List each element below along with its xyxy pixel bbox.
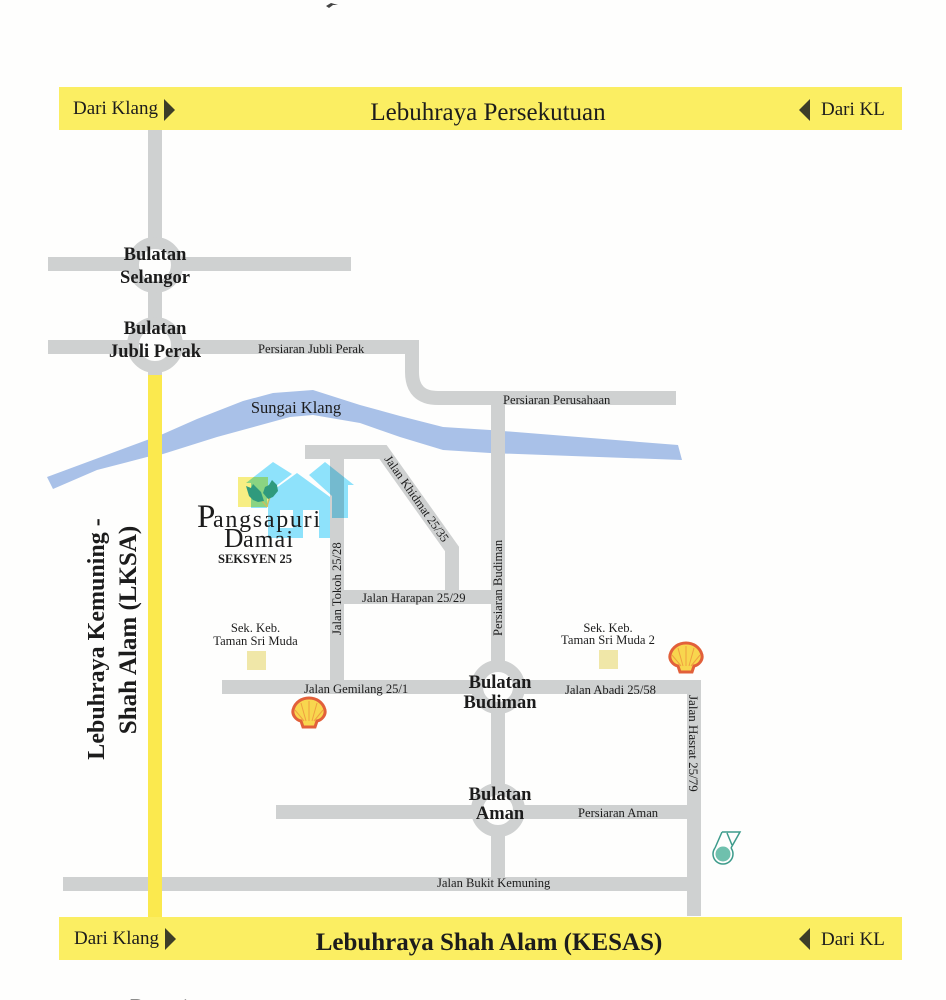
road name labels: Persiaran Budiman	[491, 539, 505, 636]
river: Sungai Klang	[47, 390, 682, 489]
school: Sek. Keb. Taman Sri Muda: Taman Sri Muda	[213, 634, 298, 648]
text: Dari Klang bottom: Dari Klang	[74, 928, 159, 949]
text: Dari KL top: Dari KL	[821, 99, 885, 120]
roundabout labels: Jubli Perak	[109, 342, 202, 362]
road: Persiaran Jubli Perak and Persiaran Perusahaan	[48, 347, 676, 398]
roundabout: Bulatan Aman	[477, 789, 519, 831]
road name labels: Jalan Hasrat 25/79	[686, 695, 701, 792]
top banner: Lebuhraya Persekutuan	[59, 87, 902, 130]
arrow: right top	[164, 99, 175, 121]
road: Lebuhraya Kemuning yellow	[148, 375, 162, 920]
roundabout labels: Bulatan	[124, 245, 187, 265]
road name labels: Jalan Khidmat 25/35	[382, 453, 452, 545]
heading: Lebuhraya Persekutuan: Lebuhraya Persekutuan	[370, 99, 606, 126]
road: north-south trunk to Persekutuan	[148, 128, 162, 376]
road name labels: Jalan Abadi 25/58	[565, 683, 656, 697]
label: Sungai Klang: Sungai Klang	[251, 398, 341, 417]
school: Sek. Keb. Taman Sri Muda 2	[561, 621, 655, 669]
roundabouts	[133, 243, 519, 831]
road: Jalan Tokoh and top spur	[305, 452, 337, 682]
roundabout: Bulatan Jubli Perak	[133, 323, 177, 367]
road name labels: Jalan Harapan 25/29	[362, 591, 466, 605]
roundabout labels: Selangor	[120, 268, 190, 288]
roundabout labels: Bulatan	[469, 673, 532, 693]
text: Dari KL bottom: Dari KL	[821, 929, 885, 950]
road name labels: Jalan Tokoh 25/28	[330, 542, 344, 635]
school: Sek. Keb. Taman Sri Muda 2: Taman Sri Muda 2	[561, 633, 655, 647]
roundabout labels	[109, 245, 537, 824]
road name labels: Jalan Bukit Kemuning	[437, 876, 551, 890]
logo yellow square	[238, 477, 268, 507]
logo wordmark	[197, 499, 320, 553]
highway label: Lebuhraya Kemuning - Shah Alam (LKSA): Shah Alam (LKSA)	[115, 526, 142, 734]
text: Dari Klang top: Dari Klang	[73, 98, 158, 119]
road: Bulatan Selangor east-west	[48, 257, 351, 271]
school: Sek. Keb. Taman Sri Muda 2: Sek. Keb.	[583, 621, 633, 635]
roundabout: Bulatan Selangor	[133, 243, 177, 287]
road: Jalan Bukit Kemuning	[63, 877, 694, 891]
highway label: Lebuhraya Kemuning - Shah Alam (LKSA)	[84, 518, 142, 760]
logo subtitle: SEKSYEN 25	[218, 552, 292, 566]
arrow: left top	[799, 99, 810, 121]
arrow: right bottom	[165, 928, 176, 950]
road name labels: Persiaran Jubli Perak	[258, 342, 365, 356]
road: Jalan Hasrat	[687, 680, 701, 916]
road name labels: Jalan Gemilang 25/1	[304, 682, 408, 696]
logo wordmark: P	[197, 499, 215, 535]
roundabout labels: Aman	[476, 804, 525, 824]
road: Jalan Khidmat	[337, 452, 452, 597]
logo: Pangsapuri Damai	[197, 462, 354, 566]
heading: Lebuhraya Shah Alam (KESAS): Lebuhraya Shah Alam (KESAS)	[316, 929, 662, 956]
icon: Shell station near school 2	[670, 643, 702, 672]
school: Sek. Keb. Taman Sri Muda	[213, 621, 298, 670]
road name labels: Persiaran Perusahaan	[503, 393, 611, 407]
highway label: Lebuhraya Kemuning - Shah Alam (LKSA): Lebuhraya Kemuning -	[84, 518, 110, 760]
roundabout labels: Bulatan	[124, 319, 187, 339]
logo wordmark: amai	[243, 527, 293, 553]
logo house icon	[246, 462, 354, 538]
road: Persiaran Budiman	[491, 398, 505, 884]
roundabout labels: Bulatan	[469, 785, 532, 805]
road network	[48, 128, 694, 916]
logo wordmark: D	[224, 523, 244, 553]
roundabout labels: Budiman	[463, 693, 537, 713]
school: Sek. Keb. Taman Sri Muda: Sek. Keb.	[231, 621, 280, 635]
road name labels: Persiaran Aman	[578, 806, 659, 820]
roundabout: Bulatan Budiman	[477, 666, 519, 708]
arrow: left bottom	[799, 928, 810, 950]
road: Jalan Gemilang and Jalan Abadi	[222, 680, 694, 694]
road: Persiaran Aman	[276, 805, 694, 819]
bottom banner: Lebuhraya Shah Alam	[59, 917, 902, 960]
icon: Shell station near Jalan Gemilang	[293, 698, 325, 727]
logo leaf	[246, 480, 278, 507]
road name labels	[258, 342, 701, 890]
road: Jalan Harapan	[337, 590, 498, 604]
icon: Petronas station	[713, 832, 740, 864]
logo wordmark: angsapuri	[213, 507, 320, 533]
